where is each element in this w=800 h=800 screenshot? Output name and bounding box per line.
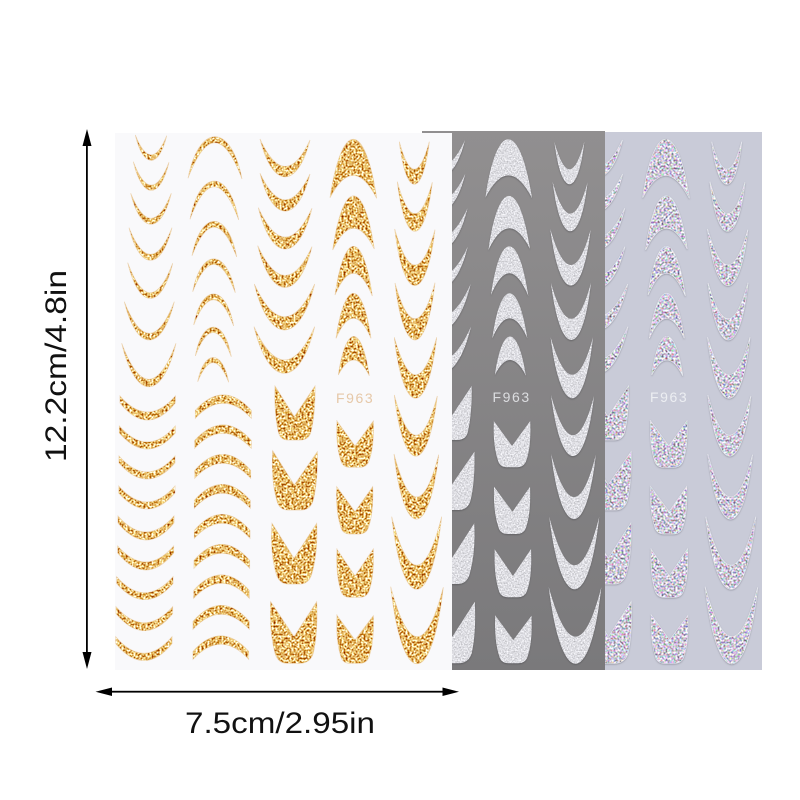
silver stickers <box>452 139 602 665</box>
column 3 top: thick crescents <box>254 139 315 373</box>
column 4 top: filled arches <box>330 139 377 376</box>
column 3 bottom: V shapes <box>270 386 317 663</box>
gold glitter stickers <box>116 135 443 664</box>
arrow: vertical height dimension <box>82 129 92 669</box>
holographic stickers <box>605 139 758 666</box>
column 1 top: thin smile curves <box>122 135 176 387</box>
column 5: deep crescents <box>391 142 443 664</box>
label: height dimension: 12.2cm/4.8in <box>40 270 73 462</box>
white sheet background <box>115 133 452 670</box>
arrow: horizontal width dimension <box>96 688 459 696</box>
label: F963 on holographic sheet: F963 <box>650 389 688 405</box>
label: width dimension: 7.5cm/2.95in <box>185 707 375 740</box>
label: F963 on gold sheet: F963 <box>336 390 374 406</box>
column 1 bottom: wide smile bands <box>116 396 175 661</box>
column 2 bottom: wide frown bands <box>193 395 251 659</box>
column 2 top: thin arches <box>188 137 242 382</box>
panel: pale lilac holographic sticker sheet <box>605 132 762 670</box>
label: F963 on dark sheet: F963 <box>492 389 531 405</box>
dark sheet background <box>422 131 605 670</box>
column 4 bottom: small V shapes <box>337 421 373 663</box>
holographic sheet background <box>605 132 762 670</box>
panel: dark grey silver sticker sheet <box>409 131 605 670</box>
panel: white gold glitter sticker sheet <box>115 133 452 670</box>
